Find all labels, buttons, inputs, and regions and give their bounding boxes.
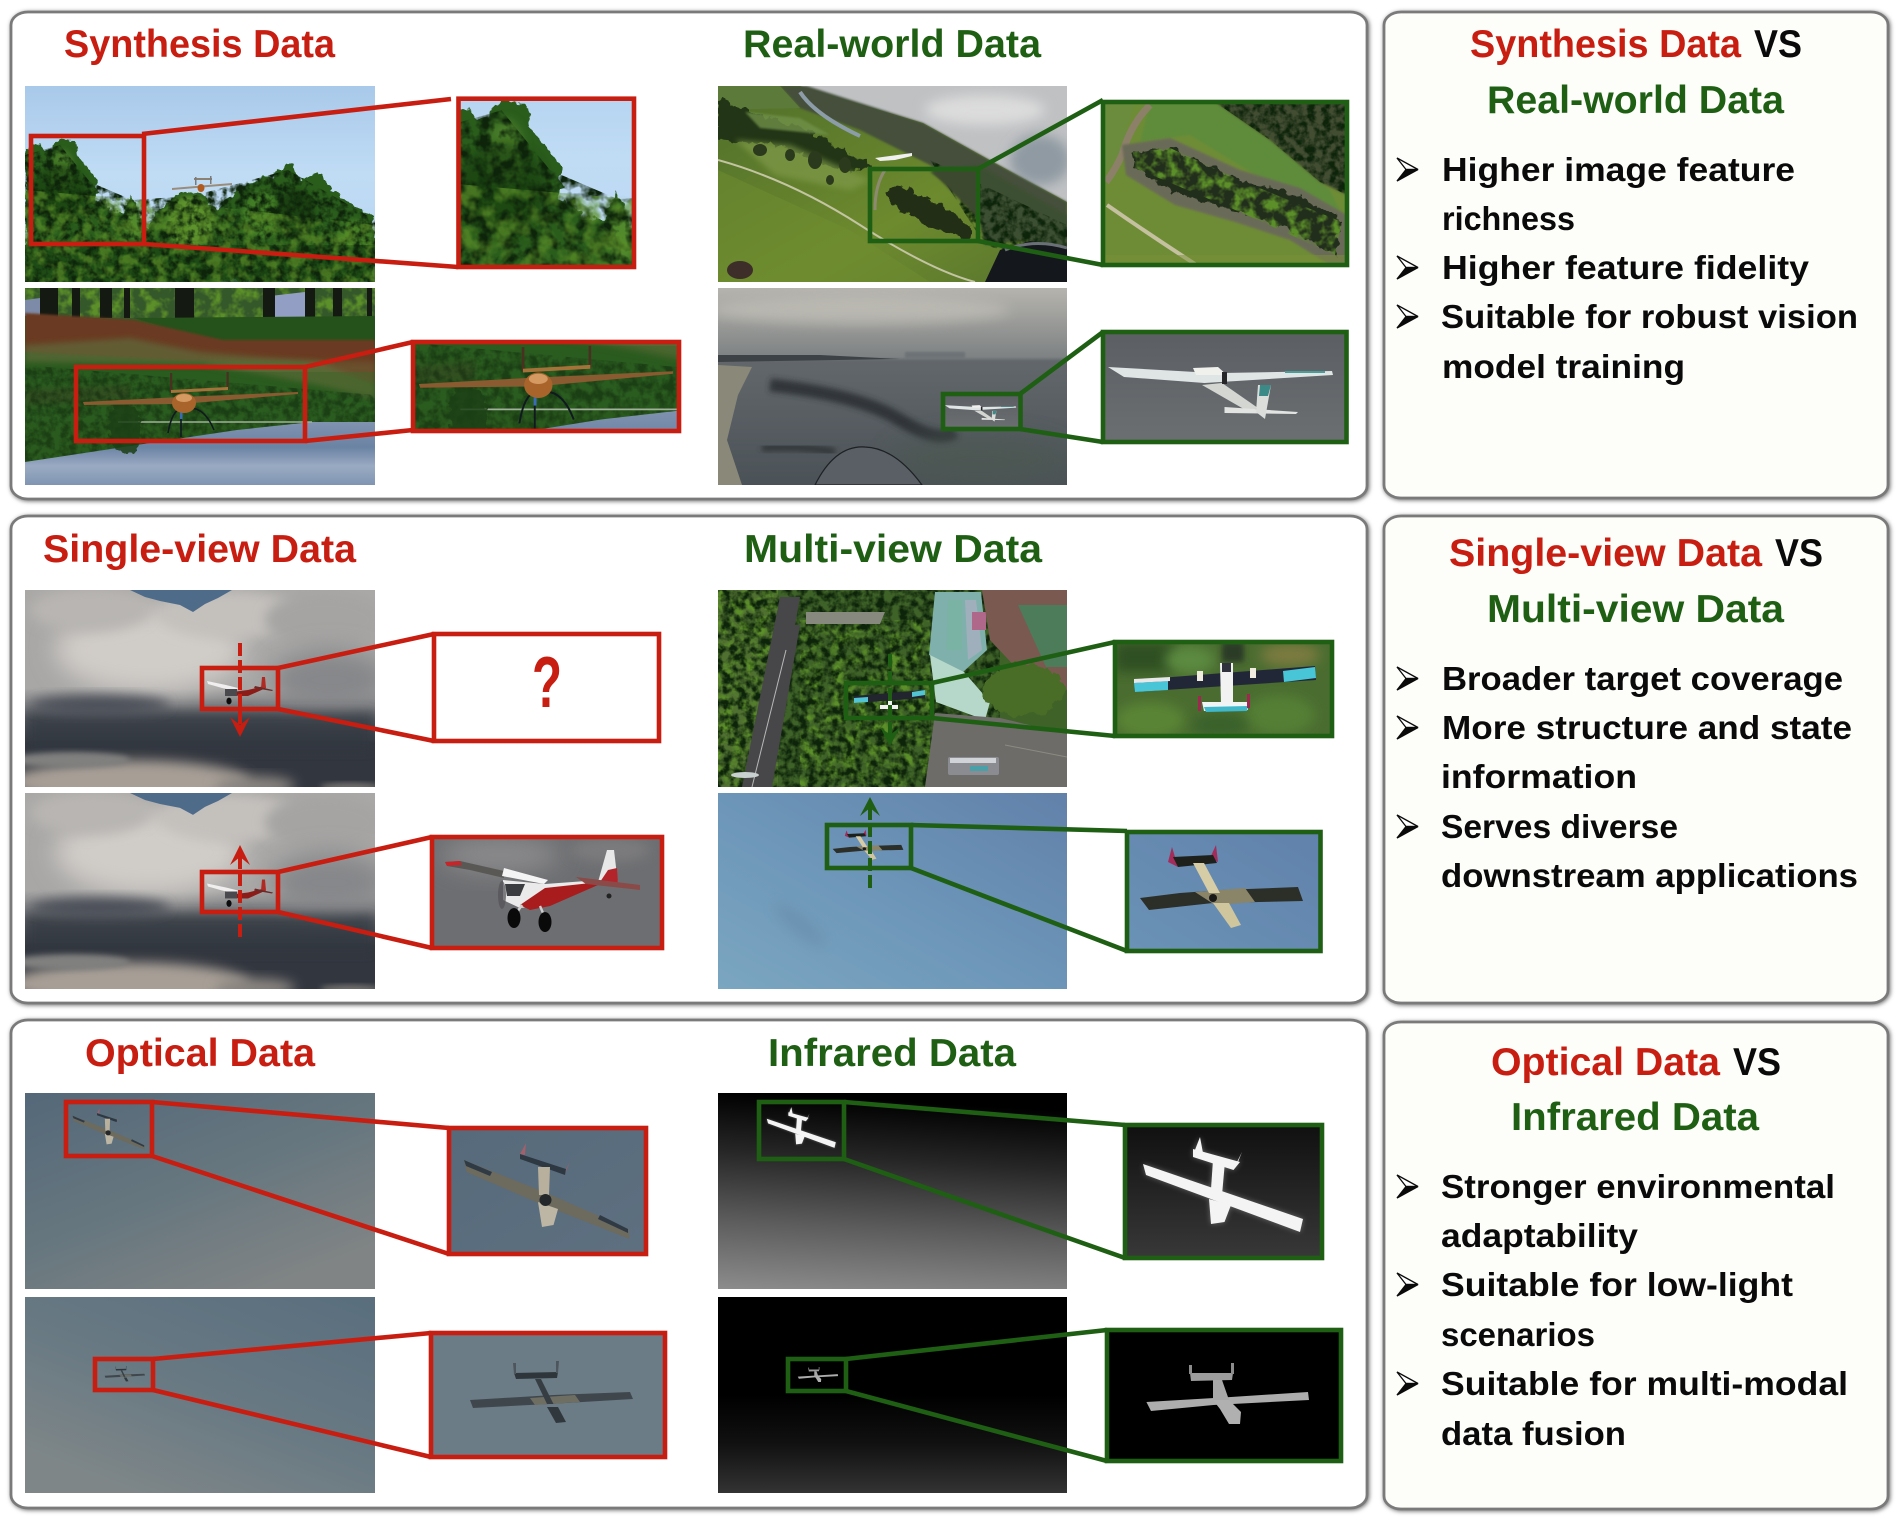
- photo: synthetic drone on grass: [25, 288, 375, 485]
- photo: infrared drone, upper view: [718, 1093, 1067, 1289]
- panel: single-view vs multi-view images: [10, 516, 1367, 1006]
- heading: Single-view Data: Single-view Data: [43, 528, 356, 571]
- photo: drone against blue sky: [718, 793, 1067, 989]
- arrow: multi-view downward dashed direction: [880, 654, 900, 746]
- photo: infrared drone, distant view: [718, 1297, 1067, 1493]
- comparison title line 1: VS: [1754, 23, 1802, 66]
- bullet list: model training: [1442, 349, 1685, 386]
- callout: landscape zoom: [870, 100, 1347, 265]
- callout: blue-sky drone zoom: [827, 825, 1320, 951]
- callout: infrared drone zoom: [759, 1102, 1322, 1258]
- comparison title line 1: Synthesis Data: [1470, 23, 1741, 66]
- bullet list: Suitable for low-light: [1441, 1267, 1793, 1304]
- arrow: upward dashed direction: [230, 845, 250, 937]
- bullet list: Serves diverse: [1441, 809, 1678, 846]
- photo: optical drone, upper view: [25, 1093, 375, 1289]
- panel background: [1384, 12, 1888, 498]
- panel background: [11, 516, 1367, 1003]
- heading: Synthesis Data: Synthesis Data: [64, 23, 335, 66]
- bullet list: [1397, 661, 1858, 895]
- bullet list: scenarios: [1441, 1317, 1595, 1354]
- photo: cloud background with aircraft, front view: [25, 590, 375, 787]
- panel: single-view vs multi-view comparison: [1384, 516, 1888, 1003]
- callout: aircraft over water zoom: [943, 332, 1346, 442]
- photo: cloud background with aircraft, back view: [25, 793, 375, 989]
- bullet list: More structure and state: [1442, 710, 1852, 747]
- callout: infrared distant drone zoom: [788, 1330, 1341, 1461]
- photo: optical drone, distant view: [25, 1297, 375, 1493]
- bullet list: richness: [1442, 201, 1575, 238]
- bullet list: information: [1441, 759, 1637, 796]
- comparison title line 2: Real-world Data: [1487, 79, 1784, 122]
- arrow: downward dashed direction: [230, 643, 250, 737]
- comparison title line 1: VS: [1775, 532, 1823, 575]
- callout: multi-view aerial drone zoom: [846, 642, 1332, 738]
- bullet list: Suitable for multi-modal: [1441, 1366, 1848, 1403]
- comparison title line 2: Infrared Data: [1511, 1096, 1759, 1139]
- panel: optical vs infrared comparison: [1384, 1022, 1888, 1509]
- callout: unknown view with question mark: ?: [532, 643, 562, 723]
- comparison title line 2: Multi-view Data: [1487, 588, 1784, 631]
- callout: aircraft zoom: [202, 837, 662, 948]
- callout: optical distant drone zoom: [95, 1333, 665, 1457]
- comparison title line 1: Single-view Data: [1449, 532, 1762, 575]
- photo: real aircraft over water: [718, 288, 1067, 485]
- heading: Real-world Data: Real-world Data: [743, 23, 1041, 66]
- heading: Infrared Data: Infrared Data: [768, 1032, 1016, 1075]
- bullet list: Suitable for robust vision: [1441, 299, 1858, 336]
- bullet list: [1397, 152, 1858, 386]
- photo: aerial stadium and trees: [718, 590, 1067, 787]
- panel: optical vs infrared images: [11, 1020, 1367, 1508]
- bullet list: adaptability: [1441, 1218, 1638, 1255]
- panel: synthesis vs real-world comparison: [1384, 12, 1888, 498]
- panel background: [11, 12, 1367, 499]
- bullet list: data fusion: [1441, 1416, 1626, 1453]
- comparison title line 1: VS: [1733, 1041, 1781, 1084]
- callout: optical drone zoom: [66, 1102, 646, 1254]
- photo: real aerial landscape: [718, 86, 1067, 282]
- bullet list: [1397, 1169, 1848, 1453]
- callout: synthetic drone zoom: [76, 239, 764, 489]
- bullet list: Broader target coverage: [1442, 661, 1843, 698]
- heading: Multi-view Data: Multi-view Data: [744, 528, 1042, 571]
- panel background: [1384, 516, 1888, 1003]
- bullet list: downstream applications: [1441, 858, 1858, 895]
- photo: synthetic trees with drone: [25, 86, 375, 282]
- panel background: [11, 1020, 1367, 1508]
- arrow: multi-view upward dashed direction: [860, 797, 880, 888]
- callout: tree zoom: [31, 15, 1010, 332]
- comparison title line 1: Optical Data: [1491, 1041, 1720, 1084]
- bullet list: Stronger environmental: [1441, 1169, 1835, 1206]
- callout: unknown view with question mark: [202, 634, 659, 741]
- bullet list: Higher feature fidelity: [1442, 250, 1809, 287]
- panel: synthesis vs real-world images: [11, 12, 1367, 499]
- heading: Optical Data: Optical Data: [85, 1032, 315, 1075]
- bullet list: Higher image feature: [1442, 152, 1795, 189]
- panel background: [1384, 1022, 1888, 1509]
